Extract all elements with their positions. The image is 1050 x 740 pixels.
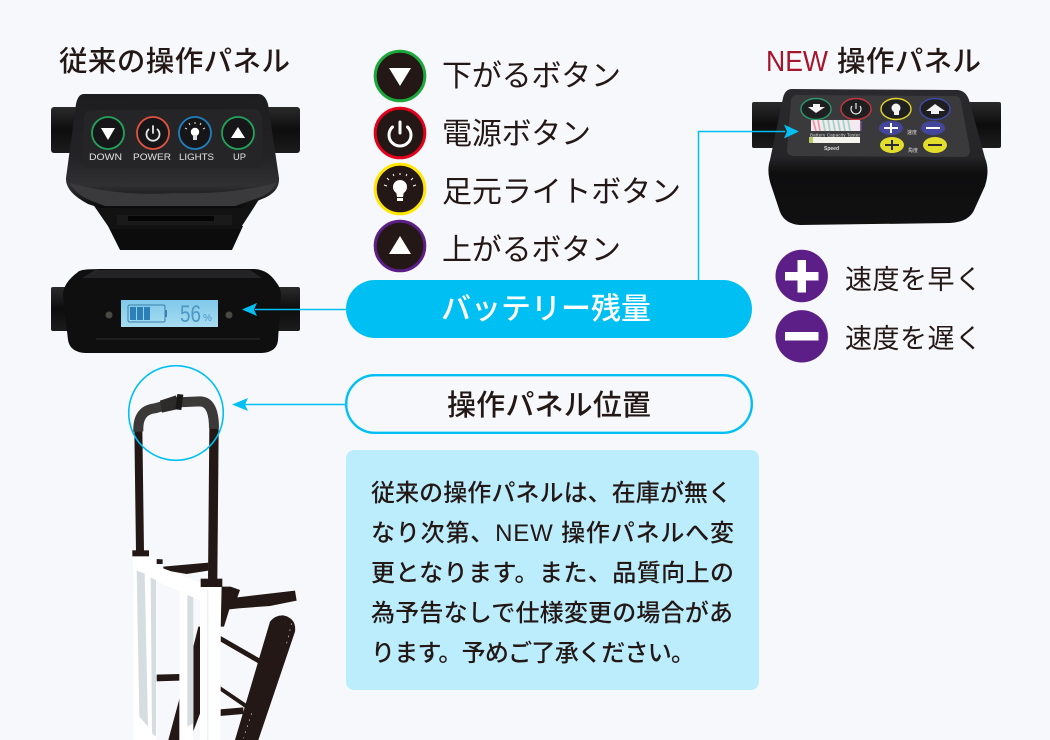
heading: conventional panel: 従来の操作パネル xyxy=(59,46,290,78)
new panel: power button xyxy=(841,98,871,120)
legend: down button xyxy=(375,51,621,101)
speed minus button xyxy=(921,121,945,135)
legend: light button: 足元ライトボタン xyxy=(442,176,681,209)
folded track belt xyxy=(235,615,295,740)
button labels: DOWN xyxy=(89,152,122,163)
legend: down button: 下がるボタン xyxy=(442,60,621,93)
notice box: ります。予めご了承ください。 xyxy=(371,640,695,667)
rear struts xyxy=(150,559,297,740)
button: power xyxy=(137,117,169,149)
photo: battery display panel xyxy=(51,269,300,353)
label: faster: 速度を早く xyxy=(845,265,982,295)
highlight circle on handle xyxy=(129,366,223,460)
notice box: 更となります。また、品質向上の xyxy=(371,560,734,587)
button labels: LIGHTS xyxy=(179,152,214,163)
button labels xyxy=(89,152,246,163)
new panel: light button xyxy=(881,98,911,120)
notice box: 為予告なしで仕様変更の場合があ xyxy=(371,600,733,627)
heading: new panel: 操作パネル xyxy=(837,46,981,78)
photo: hand truck xyxy=(132,394,297,740)
battery capacity gauge: Battery Capacity Tester xyxy=(810,132,860,138)
new panel plate xyxy=(787,95,970,157)
photo: new control panel xyxy=(752,89,1001,225)
button: up xyxy=(222,117,254,149)
legend: up button xyxy=(375,221,621,271)
heading: new panel xyxy=(766,46,981,78)
lcd screen: 56 xyxy=(180,301,201,328)
battery capacity gauge: Speed xyxy=(824,146,839,152)
handle tubes xyxy=(138,394,214,580)
notice box xyxy=(346,450,759,690)
pill: panel position xyxy=(346,375,752,433)
pill: battery level: バッテリー残量 xyxy=(441,293,651,326)
speed label: 速度 xyxy=(907,129,917,136)
pill: battery level xyxy=(346,280,752,338)
label: slower: 速度を遅く xyxy=(845,324,982,354)
legend: light button xyxy=(375,164,681,214)
speed plus button xyxy=(879,121,903,135)
photo: conventional control panel xyxy=(51,94,300,250)
angle minus button xyxy=(923,137,947,153)
angle plus button xyxy=(880,137,904,153)
button labels: POWER xyxy=(133,152,171,163)
button labels: UP xyxy=(233,152,246,163)
notice box: 従来の操作パネルは、在庫が無く xyxy=(371,480,732,507)
panel plate xyxy=(82,109,263,168)
legend: power button: 電源ボタン xyxy=(442,118,591,151)
notice box: なり次第、NEW 操作パネルへ変 xyxy=(371,520,734,547)
connector arrow: position pill to handle xyxy=(232,398,346,411)
pill: panel position: 操作パネル位置 xyxy=(447,389,651,422)
heading: new panel: NEW xyxy=(766,46,829,78)
lcd screen xyxy=(121,300,218,328)
connector arrow: battery pill to conventional display xyxy=(242,303,346,316)
icon: minus speed xyxy=(776,310,828,362)
battery capacity gauge xyxy=(809,120,862,152)
angle label: 角度 xyxy=(908,147,918,154)
icon: plus speed xyxy=(776,250,828,302)
white frame xyxy=(132,557,221,740)
connector arrow: battery pill to new panel xyxy=(698,124,799,281)
new panel: up button xyxy=(920,98,950,120)
collars xyxy=(132,550,222,587)
legend: up button: 上がるボタン xyxy=(442,234,621,267)
legend: power button xyxy=(375,108,591,158)
button: down xyxy=(92,117,124,149)
button: lights xyxy=(179,117,211,149)
lcd screen: % xyxy=(203,313,212,324)
new panel: down button xyxy=(801,98,831,120)
